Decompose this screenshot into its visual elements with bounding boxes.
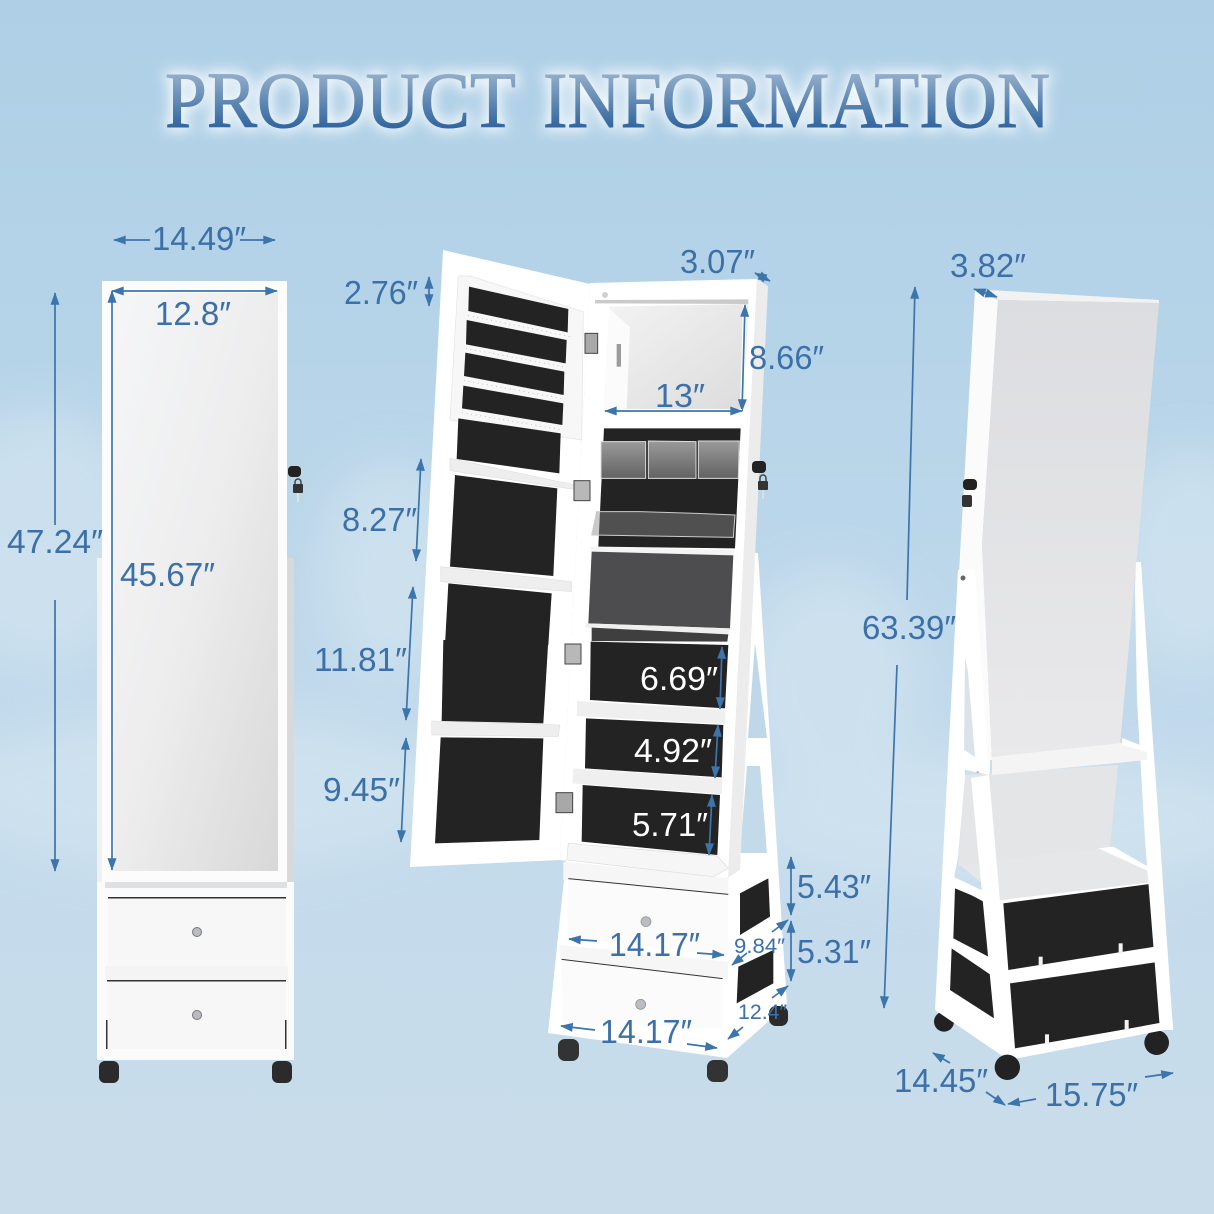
dimension: 4.92 xyxy=(634,725,718,778)
front wheels xyxy=(558,1039,728,1082)
dimension: 6.69 xyxy=(640,647,722,709)
dimension: 63.39 total height xyxy=(862,287,956,1008)
upper hinge xyxy=(585,333,598,353)
dimension: 2.76: 2.76″ xyxy=(344,274,418,311)
dimension: 3.82 depth: 3.82″ xyxy=(950,247,1026,284)
necklace hook dots xyxy=(462,315,570,430)
dimension: 6.69: 6.69″ xyxy=(640,660,718,697)
lower cross rails xyxy=(948,875,990,903)
product: rear view xyxy=(934,290,1173,1080)
product: open view xyxy=(410,250,788,1082)
dimension: 9.45 xyxy=(323,738,406,842)
dimension: 8.66 xyxy=(742,305,824,411)
front drawers xyxy=(559,862,728,1028)
lock and key xyxy=(288,466,303,502)
dimension: 14.45 xyxy=(894,1053,1005,1105)
dimension: 8.27 xyxy=(342,459,421,561)
cabinet interior lower xyxy=(567,642,728,877)
title xyxy=(165,58,1050,145)
dimension: 14.17 base: 14.17″ xyxy=(600,1013,692,1050)
title: INFORMATION xyxy=(543,58,1050,145)
cabinet body xyxy=(560,279,768,878)
middle hinge xyxy=(574,481,590,501)
lock and keys xyxy=(752,461,768,499)
dimension: 4.92: 4.92″ xyxy=(634,732,712,769)
dimension: 15.75: 15.75″ xyxy=(1045,1076,1138,1113)
lock xyxy=(962,479,977,507)
title: PRODUCT xyxy=(165,58,516,145)
dimension: 11.81 xyxy=(314,587,413,720)
title: PRODUCT xyxy=(165,58,516,145)
dimension: 13 xyxy=(605,377,742,414)
dimension: 47.24 height: 47.24″ xyxy=(7,523,103,560)
open door xyxy=(410,250,590,867)
dimension: 13: 13″ xyxy=(655,377,705,414)
door lower panels xyxy=(432,640,581,843)
dimension: 14.17 base xyxy=(561,1013,717,1050)
stand lower hull with drawers xyxy=(935,847,1173,1060)
left A-frame xyxy=(935,570,1013,1050)
title: INFORMATION xyxy=(543,58,1050,145)
dimension: 8.66: 8.66″ xyxy=(749,339,824,376)
dimension: 15.75 xyxy=(1008,1073,1173,1113)
dimension: 12.4 xyxy=(728,986,788,1039)
dimension: 63.39 total height: 63.39″ xyxy=(862,609,956,646)
dimension: 9.45: 9.45″ xyxy=(323,771,400,808)
front wheel xyxy=(995,1055,1020,1080)
base with two drawers xyxy=(97,882,294,1060)
felt panels xyxy=(445,287,568,645)
dimension: 11.81: 11.81″ xyxy=(314,641,407,678)
inner mirror and shelf xyxy=(585,547,734,642)
stand side rails xyxy=(97,558,294,884)
top mirror compartment xyxy=(595,292,748,412)
dimension: 5.43 xyxy=(791,857,871,915)
dimension: 45.67 mirror height: 45.67″ xyxy=(120,556,215,593)
dimension: 8.27: 8.27″ xyxy=(342,501,417,538)
dimension: 12.4: 12.4″ xyxy=(738,1001,788,1024)
middle shelf xyxy=(953,738,1147,775)
dimension: 14.45: 14.45″ xyxy=(894,1062,988,1099)
dimension: 9.84: 9.84″ xyxy=(734,935,786,958)
dimension: 14.17 upper drawer: 14.17″ xyxy=(609,926,700,963)
rear wheel xyxy=(769,1006,788,1026)
dimension: 5.31 xyxy=(791,921,871,981)
side drawers xyxy=(737,878,773,1003)
door jewelry panels xyxy=(441,276,598,645)
dimension: 3.07 depth: 3.07″ xyxy=(680,243,755,280)
dimension: 5.71: 5.71″ xyxy=(632,806,708,843)
drawer pins xyxy=(1039,957,1043,967)
dimension: 14.49 width: 14.49″ xyxy=(152,220,246,257)
necklace frame xyxy=(450,276,583,440)
dimension: 5.43: 5.43″ xyxy=(797,868,871,905)
dimension: 5.31: 5.31″ xyxy=(797,933,871,970)
hook bar upper xyxy=(450,458,575,489)
mirror door xyxy=(102,281,287,882)
hook bar middle xyxy=(441,567,572,592)
dimension: 9.84 xyxy=(732,920,788,965)
black section with bins xyxy=(592,428,741,548)
dimension: 12.8 mirror width: 12.8″ xyxy=(155,295,231,332)
stand A-frame xyxy=(548,553,787,1058)
right A-frame xyxy=(1135,562,1173,1030)
rear wheels xyxy=(934,1012,1169,1055)
shelf above drawers xyxy=(960,848,1157,900)
wheels xyxy=(99,1061,292,1083)
dimension: 5.71 xyxy=(632,795,712,855)
product: front view closed xyxy=(97,281,303,1083)
back board xyxy=(958,290,1159,866)
cabinet interior upper xyxy=(585,292,748,642)
